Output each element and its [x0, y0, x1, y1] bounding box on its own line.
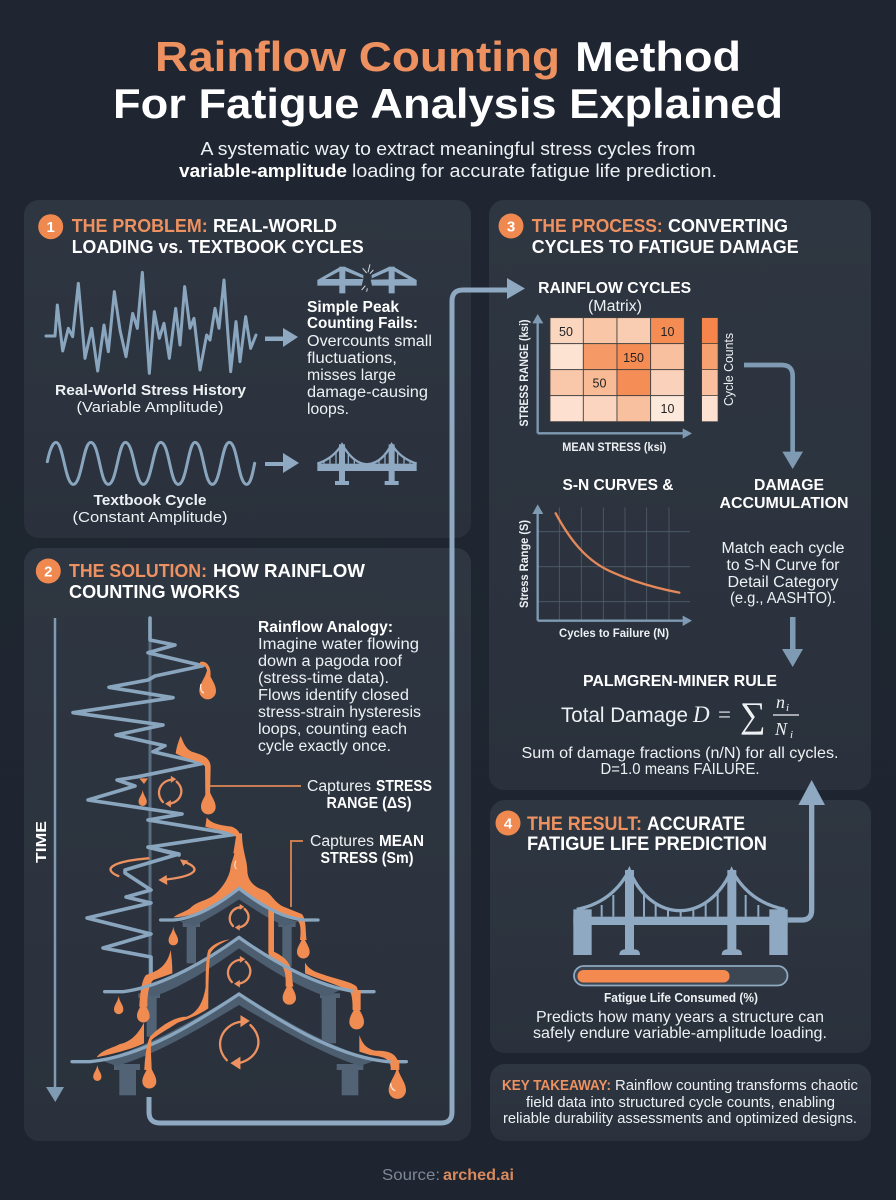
heading: the process: THE PROCESS:	[532, 215, 663, 236]
text: result description	[533, 1009, 827, 1042]
panel: key takeaway: KEY TAKEAWAY:	[502, 1077, 611, 1094]
text: rainflow analogy: loops, counting each	[258, 721, 407, 738]
label: rainflow cycles matrix: (Matrix)	[588, 298, 642, 315]
arrow: stress history to peak counting	[265, 328, 298, 347]
axis: time	[33, 618, 64, 1102]
tier columns	[114, 922, 363, 1095]
text: rainflow analogy: Rainflow Analogy:	[258, 619, 393, 636]
heading: the result: 4	[504, 816, 513, 832]
panel: the process	[489, 200, 871, 790]
label: real-world stress history	[55, 382, 247, 416]
heading: the problem: THE PROBLEM:	[72, 215, 208, 236]
label: real-world stress history: (Variable Amplitude)	[76, 399, 224, 416]
text: match each cycle: Match each cycle	[722, 540, 844, 557]
callout: stress range: RANGE (ΔS)	[326, 795, 412, 812]
heading: the problem: REAL-WORLD	[213, 215, 337, 236]
heading: the process	[498, 214, 799, 257]
panel: key takeaway: reliable durability assessments and optimized designs.	[503, 1110, 857, 1127]
text: result description: safely endure variable-amplitude loading.	[533, 1025, 827, 1042]
panel: key takeaway: Rainflow counting transforms chaotic	[615, 1077, 858, 1094]
text: rainflow analogy: (stress-time data).	[258, 670, 389, 687]
water drips	[93, 861, 406, 1099]
cycle arrows on roofs	[111, 858, 258, 1070]
heading: the result	[496, 810, 767, 855]
drop highlight	[201, 684, 204, 693]
arrow: accumulation to miner rule	[782, 617, 803, 667]
text: rainflow analogy: down a pagoda roof	[258, 653, 403, 670]
callout: mean stress: STRESS (Sm)	[320, 850, 414, 867]
callout: mean stress	[291, 833, 424, 907]
text: simple peak counting fails: damage-causing	[307, 384, 428, 401]
chart: textbook sine cycle	[47, 442, 255, 484]
text: rainflow analogy: Imagine water flowing	[258, 636, 419, 653]
callout: mean stress: MEAN	[379, 833, 424, 850]
axes: matrix: MEAN STRESS (ksi)	[562, 440, 666, 454]
text: simple peak counting fails: fluctuations,	[307, 350, 397, 367]
heading: the solution: THE SOLUTION:	[69, 560, 207, 581]
icon: broken bridge	[317, 264, 417, 293]
text: simple peak counting fails	[307, 299, 432, 418]
text: simple peak counting fails: loops.	[307, 401, 349, 418]
formula: total damage: Total Damage	[561, 704, 688, 727]
formula: total damage: ∑	[740, 695, 766, 735]
source	[382, 1167, 514, 1184]
text: simple peak counting fails: misses large	[307, 367, 396, 384]
callout: stress range: STRESS	[376, 778, 432, 795]
progress bar: fatigue life consumed	[574, 966, 788, 1005]
title	[113, 33, 783, 127]
heading: the problem	[38, 214, 364, 257]
label: textbook cycle: Textbook Cycle	[94, 492, 206, 509]
text: rainflow analogy: Flows identify closed	[258, 687, 409, 704]
heading: the result: THE RESULT:	[527, 814, 642, 835]
formula: total damage: i	[786, 702, 789, 714]
formula: total damage	[561, 692, 799, 741]
subtitle: A systematic way to extract meaningful stress cycles from	[200, 139, 696, 159]
heading: the solution	[36, 558, 366, 602]
text: sum of damage fractions: Sum of damage fractions (n/N) for all cycles.	[522, 745, 838, 762]
callout: stress range	[210, 778, 432, 812]
progress bar: fatigue life consumed: Fatigue Life Consumed (%)	[604, 991, 758, 1005]
arrow: result to miner rule	[788, 780, 825, 920]
label: textbook cycle: (Constant Amplitude)	[72, 509, 228, 526]
chart: cycle matrix	[550, 318, 684, 422]
formula: total damage: =	[718, 702, 731, 727]
heading: palmgren-miner rule: PALMGREN-MINER RULE	[583, 673, 777, 690]
arrow: textbook cycle to bridge	[265, 453, 299, 473]
title: Method	[575, 33, 741, 80]
label: rainflow cycles matrix	[538, 280, 691, 315]
heading: the result: FATIGUE LIFE PREDICTION	[527, 834, 767, 855]
axis: time: TIME	[33, 821, 50, 863]
text: rainflow analogy	[258, 619, 421, 755]
subtitle: loading for accurate fatigue life prediction.	[352, 161, 717, 181]
title: Rainflow Counting	[155, 33, 560, 80]
chart: real-world stress history	[46, 272, 256, 373]
icon: intact bridge	[317, 444, 417, 485]
icon: suspension bridge	[573, 870, 788, 955]
legend: cycle counts	[702, 318, 736, 422]
arrow: flow from solution to process	[149, 278, 525, 1123]
axes: matrix: STRESS RANGE (ksi)	[519, 319, 531, 426]
formula: total damage: D	[692, 702, 710, 727]
label: rainflow cycles matrix: RAINFLOW CYCLES	[538, 280, 691, 297]
chart: cycle matrix: 10	[661, 402, 674, 416]
heading: the problem: LOADING vs. TEXTBOOK CYCLES	[72, 236, 364, 257]
chart: s-n curve	[519, 504, 692, 640]
chart: stress-time history	[73, 618, 235, 975]
water flows on roofs	[97, 833, 399, 1067]
chart: cycle matrix: 50	[593, 376, 606, 390]
pagoda roof illustration	[72, 833, 406, 1099]
subtitle	[179, 139, 717, 181]
roof edges	[72, 888, 406, 1062]
arrow: matrix to damage accumulation	[744, 365, 803, 469]
heading: the solution: HOW RAINFLOW	[213, 560, 366, 581]
heading: the process: 3	[507, 218, 515, 236]
text: rainflow analogy: stress-strain hysteresis	[258, 704, 421, 721]
text: result description: Predicts how many years a structure can	[536, 1009, 824, 1026]
heading: damage accumulation: ACCUMULATION	[720, 495, 848, 512]
heading: damage accumulation	[720, 477, 848, 512]
panel: key takeaway: field data into structured cycle counts, enabling	[526, 1094, 835, 1111]
heading: the result: ACCURATE	[647, 814, 745, 835]
formula: total damage: i	[790, 729, 793, 741]
heading: damage accumulation: DAMAGE	[754, 477, 824, 494]
chart: s-n curve: Stress Range (S)	[519, 520, 531, 608]
heading: the problem: 1	[47, 219, 55, 236]
text: sum of damage fractions: D=1.0 means FAILURE.	[600, 761, 760, 778]
callout: mean stress: Captures	[310, 833, 374, 850]
text: match each cycle: to S-N Curve for	[726, 557, 840, 574]
label: real-world stress history: Real-World Stress History	[55, 382, 247, 399]
text: match each cycle: Detail Category	[728, 574, 839, 591]
text: simple peak counting fails: Overcounts small	[307, 333, 432, 350]
label: textbook cycle	[72, 492, 228, 526]
heading: the process: CONVERTING	[668, 215, 788, 236]
text: sum of damage fractions	[522, 745, 838, 778]
axes: matrix	[519, 314, 692, 454]
panel: the solution	[24, 548, 471, 1141]
callout: stress range: Captures	[307, 778, 371, 795]
title: For Fatigue Analysis Explained	[113, 80, 783, 127]
heading: the solution: 2	[44, 564, 52, 580]
source: arched.ai	[443, 1167, 514, 1184]
heading: s-n curves: S-N CURVES &	[562, 477, 674, 494]
source: Source:	[382, 1167, 440, 1184]
text: match each cycle: (e.g., AASHTO).	[730, 590, 836, 607]
illustration: upper water flows	[139, 663, 243, 853]
text: match each cycle	[722, 540, 844, 607]
formula: total damage: N	[774, 719, 788, 739]
formula: total damage: n	[776, 692, 785, 712]
heading: the process: CYCLES TO FATIGUE DAMAGE	[532, 236, 799, 257]
chart: cycle matrix: 150	[623, 351, 644, 365]
panel: the result	[490, 800, 871, 1053]
text: rainflow analogy: cycle exactly once.	[258, 738, 391, 755]
legend: cycle counts: Cycle Counts	[722, 333, 736, 406]
subtitle: variable-amplitude	[179, 161, 347, 181]
chart: cycle matrix: 50	[559, 325, 573, 339]
text: simple peak counting fails: Counting Fails:	[307, 315, 418, 332]
chart: cycle matrix: 10	[661, 325, 674, 339]
panel: key takeaway	[490, 1064, 871, 1141]
text: simple peak counting fails: Simple Peak	[307, 299, 399, 316]
chart: s-n curve: Cycles to Failure (N)	[559, 626, 669, 640]
roof undersides	[100, 887, 377, 1066]
heading: the solution: COUNTING WORKS	[69, 581, 240, 602]
panel: the problem	[24, 200, 471, 538]
